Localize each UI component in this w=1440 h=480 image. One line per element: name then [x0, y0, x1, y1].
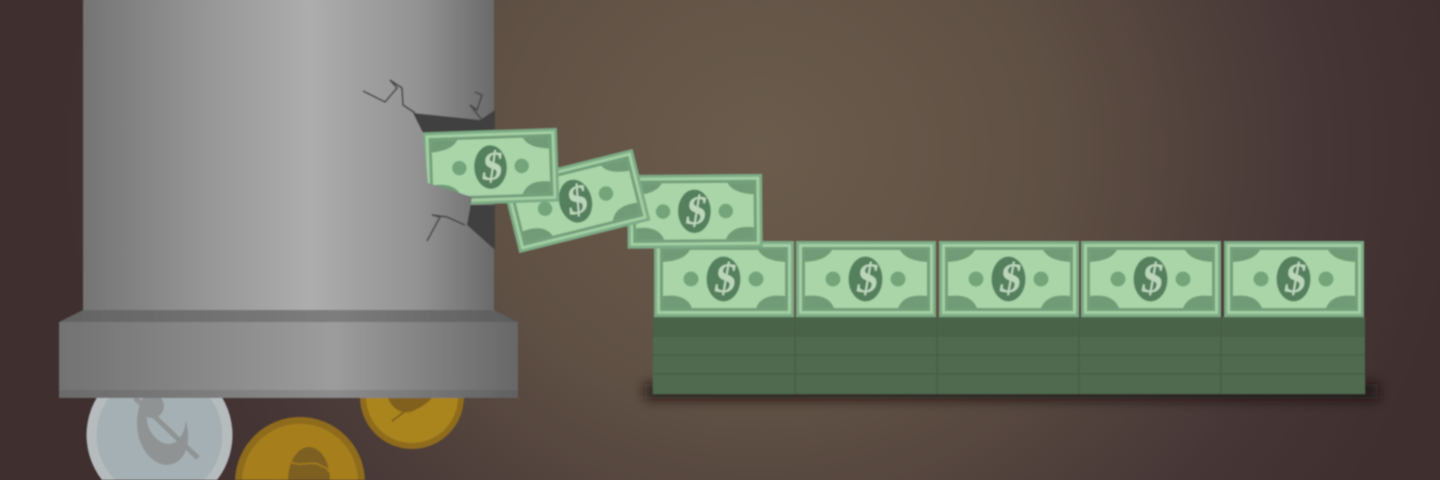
- bill 4: [1081, 241, 1221, 317]
- crack hole: [413, 110, 495, 250]
- falling bill 3: [627, 174, 763, 249]
- bill 2: $: [853, 255, 882, 302]
- bill 5: $: [1281, 255, 1310, 302]
- bill 2: [796, 241, 936, 317]
- falling bill 1: $: [480, 143, 506, 189]
- stack shadow: [645, 384, 1378, 399]
- bill 3: $: [996, 255, 1025, 302]
- falling bill 2: $: [566, 175, 589, 225]
- pipe flange: [59, 310, 518, 398]
- money stack: [653, 241, 1365, 394]
- cracks: [363, 80, 482, 241]
- coin: small gold: [360, 345, 464, 449]
- bill 1: [654, 241, 794, 317]
- bill 3: [939, 241, 1079, 317]
- bill 4: $: [1138, 255, 1167, 302]
- torn pipe edge: [400, 113, 472, 225]
- pipe top edge fill: [84, 0, 493, 3]
- falling bill 2: [502, 149, 650, 253]
- bill 1: $: [711, 255, 740, 302]
- bill 5: [1224, 241, 1364, 317]
- stack body: [653, 317, 1365, 394]
- pipe shaft: [83, 0, 494, 311]
- coin: silver: [86, 362, 232, 480]
- pipe: [59, 0, 518, 398]
- coins: [86, 345, 464, 480]
- coin: large gold: [235, 417, 365, 480]
- falling bill 1: [423, 128, 559, 206]
- falling bill 3: $: [683, 188, 711, 233]
